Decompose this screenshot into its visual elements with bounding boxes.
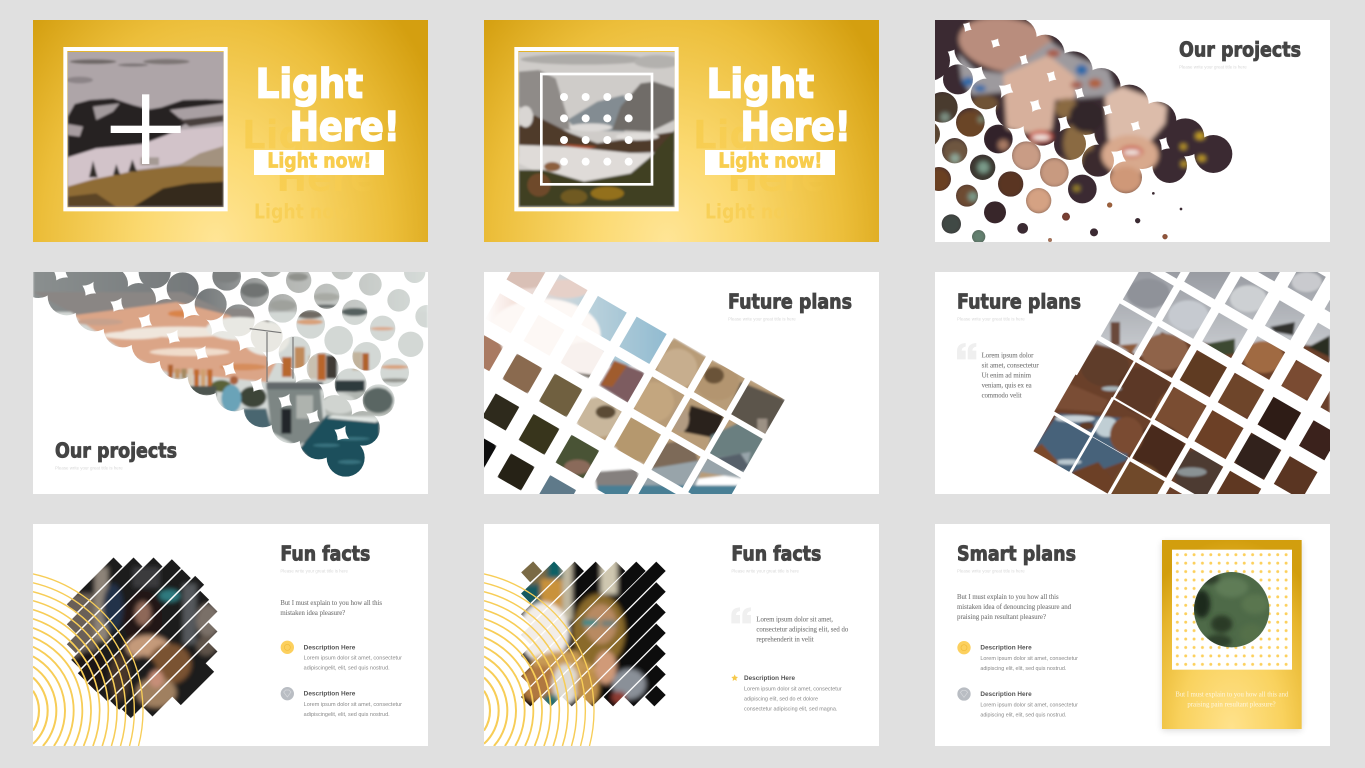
quote text bbox=[982, 352, 1039, 399]
title: Our projects bbox=[1179, 38, 1301, 62]
item: grey description bbox=[281, 687, 402, 718]
card caption: But I must explain to you how all this and bbox=[1175, 691, 1289, 699]
tiled photo: rocky coast bbox=[1034, 272, 1330, 494]
circle photo: fern bbox=[1192, 571, 1272, 649]
title: Future plans bbox=[957, 290, 1081, 314]
item: yellow description: adipiscing elit, elit, sed quis nostrud. bbox=[980, 666, 1067, 672]
intro text: mistaken idea of denouncing pleasure and bbox=[957, 602, 1071, 611]
item: grey description: Lorem ipsum dolor sit amet, consectetur bbox=[304, 702, 402, 708]
panel: slide 3 our projects with halftone portrait bbox=[935, 20, 1330, 242]
headline: Here! bbox=[741, 105, 851, 151]
headline bbox=[707, 61, 851, 151]
icon: dot grid bbox=[560, 93, 633, 166]
subtitle: Please write your great title is here bbox=[1179, 65, 1247, 70]
quote text: Lorem ipsum dolor bbox=[982, 352, 1034, 360]
striped photo: woman in fur coat bbox=[66, 558, 218, 718]
ghost text reflection: Light bbox=[693, 112, 800, 158]
card: yellow panel bbox=[1162, 540, 1302, 731]
item: star description: Description Here bbox=[744, 675, 795, 682]
card caption: praising pain resultant pleasure? bbox=[1187, 701, 1276, 709]
panel: slide 5 future plans with tiled castle bbox=[484, 272, 879, 494]
panel: slide 7 fun facts with striped portrait bbox=[33, 524, 428, 746]
icon: quote mark bbox=[731, 607, 751, 623]
quote text: sit amet, consectetur bbox=[982, 362, 1039, 370]
photo: foggy forest hill bbox=[68, 52, 224, 207]
quote text: Ut enim ad minim bbox=[982, 371, 1032, 379]
quote text: veniam, quis ex ea bbox=[982, 381, 1033, 389]
item: star description: consectetur adipiscing elit, sed magna. bbox=[744, 706, 838, 712]
headline bbox=[256, 61, 400, 151]
title: Fun facts bbox=[731, 542, 821, 566]
tiled photo: castle town bbox=[484, 272, 785, 494]
title: Smart plans bbox=[957, 542, 1076, 566]
panel: slide 6 future plans with tiled coast bbox=[935, 272, 1330, 494]
headline: Light bbox=[707, 61, 814, 107]
panel: slide 1 cover with fog photo bbox=[33, 20, 428, 242]
intro text: mistaken idea pleasure? bbox=[280, 608, 346, 617]
icon: plus cross bbox=[111, 94, 181, 164]
quote text bbox=[756, 615, 848, 644]
decorative rings bbox=[33, 574, 143, 746]
ghost text reflection: Light bbox=[242, 112, 349, 158]
item: yellow description: Description Here bbox=[980, 645, 1032, 652]
photo: mountain valley bbox=[518, 52, 675, 207]
title: Fun facts bbox=[280, 542, 370, 566]
quote text: Lorem ipsum dolor sit amet, bbox=[756, 615, 833, 624]
headline: Here! bbox=[290, 105, 400, 151]
item: yellow description: Lorem ipsum dolor sit amet, consectetur bbox=[304, 656, 402, 662]
ghost text reflection: Light now! bbox=[254, 199, 358, 223]
halftone photo: rooftop sunset bbox=[33, 272, 428, 477]
item: grey description: Lorem ipsum dolor sit amet, consectetur bbox=[980, 702, 1078, 708]
halftone photo: women faces bbox=[935, 20, 1232, 242]
icon: quote mark bbox=[957, 343, 976, 359]
intro text: praising pain resultant pleasure? bbox=[957, 612, 1047, 621]
item: yellow description: Description Here bbox=[304, 644, 356, 651]
item: yellow description bbox=[281, 641, 402, 672]
panel: slide 8 fun facts with striped woman in glasses bbox=[484, 524, 879, 746]
item: yellow description: Lorem ipsum dolor sit amet, consectetur bbox=[980, 656, 1078, 662]
item: grey description: Description Here bbox=[304, 691, 356, 698]
subtitle: Please write your great title is here bbox=[957, 569, 1025, 574]
item: grey description bbox=[957, 687, 1078, 718]
striped photo: woman with glasses bbox=[521, 561, 666, 706]
item: grey description: adipiscing elit, elit, sed quis nostrud. bbox=[980, 712, 1067, 718]
title: Our projects bbox=[55, 439, 177, 463]
photo frame bbox=[65, 49, 226, 209]
item: star description: Lorem ipsum dolor sit amet, consectetur bbox=[744, 686, 842, 692]
intro text bbox=[280, 598, 382, 617]
panel: slide 9 smart plans with yellow card bbox=[935, 524, 1330, 746]
item: yellow description bbox=[957, 641, 1078, 672]
ghost text reflection bbox=[693, 112, 826, 223]
title: Future plans bbox=[728, 290, 852, 314]
ghost text reflection: Light now! bbox=[705, 199, 809, 223]
quote text: consectetur adipiscing elit, sed do bbox=[756, 625, 848, 634]
dotted white box bbox=[1172, 550, 1292, 670]
quote text: commodo velit bbox=[982, 391, 1022, 399]
label: Light now: Light now! bbox=[718, 149, 822, 173]
item: grey description: Description Here bbox=[980, 691, 1032, 698]
ghost text reflection: Here bbox=[276, 155, 375, 201]
intro text: But I must explain to you how all this bbox=[280, 598, 382, 607]
antenna bbox=[250, 329, 293, 382]
intro text: But I must explain to you how all this bbox=[957, 592, 1059, 601]
ghost text reflection: Here bbox=[727, 155, 826, 201]
headline: Light bbox=[256, 61, 363, 107]
label: Light now: Light now! bbox=[267, 149, 371, 173]
subtitle: Please write your great title is here bbox=[957, 317, 1025, 322]
photo frame bbox=[516, 49, 677, 209]
subtitle: Please write your great title is here bbox=[728, 317, 796, 322]
item: grey description: adipiscingelit, elit, sed quis nostrud. bbox=[304, 712, 390, 718]
panel: slide 2 cover with valley photo bbox=[484, 20, 879, 242]
subtitle: Please write your great title is here bbox=[55, 466, 123, 471]
decorative rings bbox=[484, 574, 594, 746]
inner square outline bbox=[541, 74, 652, 184]
item: star description: adipiscing elit, sed do et dolore bbox=[744, 696, 818, 702]
panel: slide 4 our projects with halftone rooftop bbox=[33, 272, 428, 494]
intro text bbox=[957, 592, 1071, 621]
subtitle: Please write your great title is here bbox=[280, 569, 348, 574]
ghost text reflection bbox=[242, 112, 375, 223]
card caption bbox=[1175, 691, 1289, 709]
item: star description bbox=[731, 674, 842, 712]
subtitle: Please write your great title is here bbox=[731, 569, 799, 574]
item: yellow description: adipiscingelit, elit, sed quis nostrud. bbox=[304, 666, 390, 672]
quote text: reprehenderit in velit bbox=[756, 635, 814, 644]
